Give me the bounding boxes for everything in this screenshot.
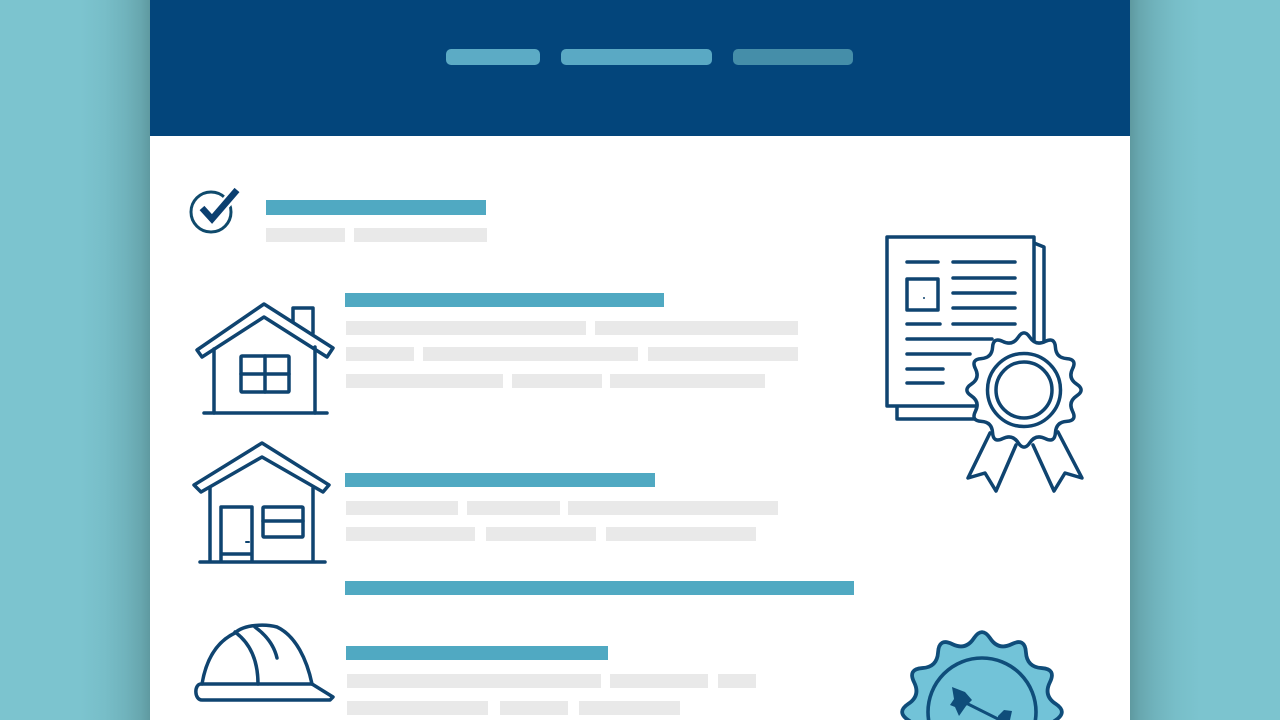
icon: hard hat xyxy=(196,625,333,700)
section 4 text block xyxy=(346,646,756,715)
icon: house with chimney xyxy=(197,304,333,413)
header band xyxy=(150,0,1130,136)
icon: check mark xyxy=(191,190,237,232)
icon: certificate document with seal xyxy=(887,237,1082,491)
title placeholder bars xyxy=(446,49,853,65)
section 1 text block xyxy=(266,200,487,242)
panel: white content sheet xyxy=(150,0,1130,720)
section 3 text block xyxy=(345,473,778,541)
icon: house with door xyxy=(194,443,329,562)
icon: key badge xyxy=(900,630,1064,720)
divider heading bar xyxy=(345,581,854,595)
section 2 text block xyxy=(345,293,798,388)
